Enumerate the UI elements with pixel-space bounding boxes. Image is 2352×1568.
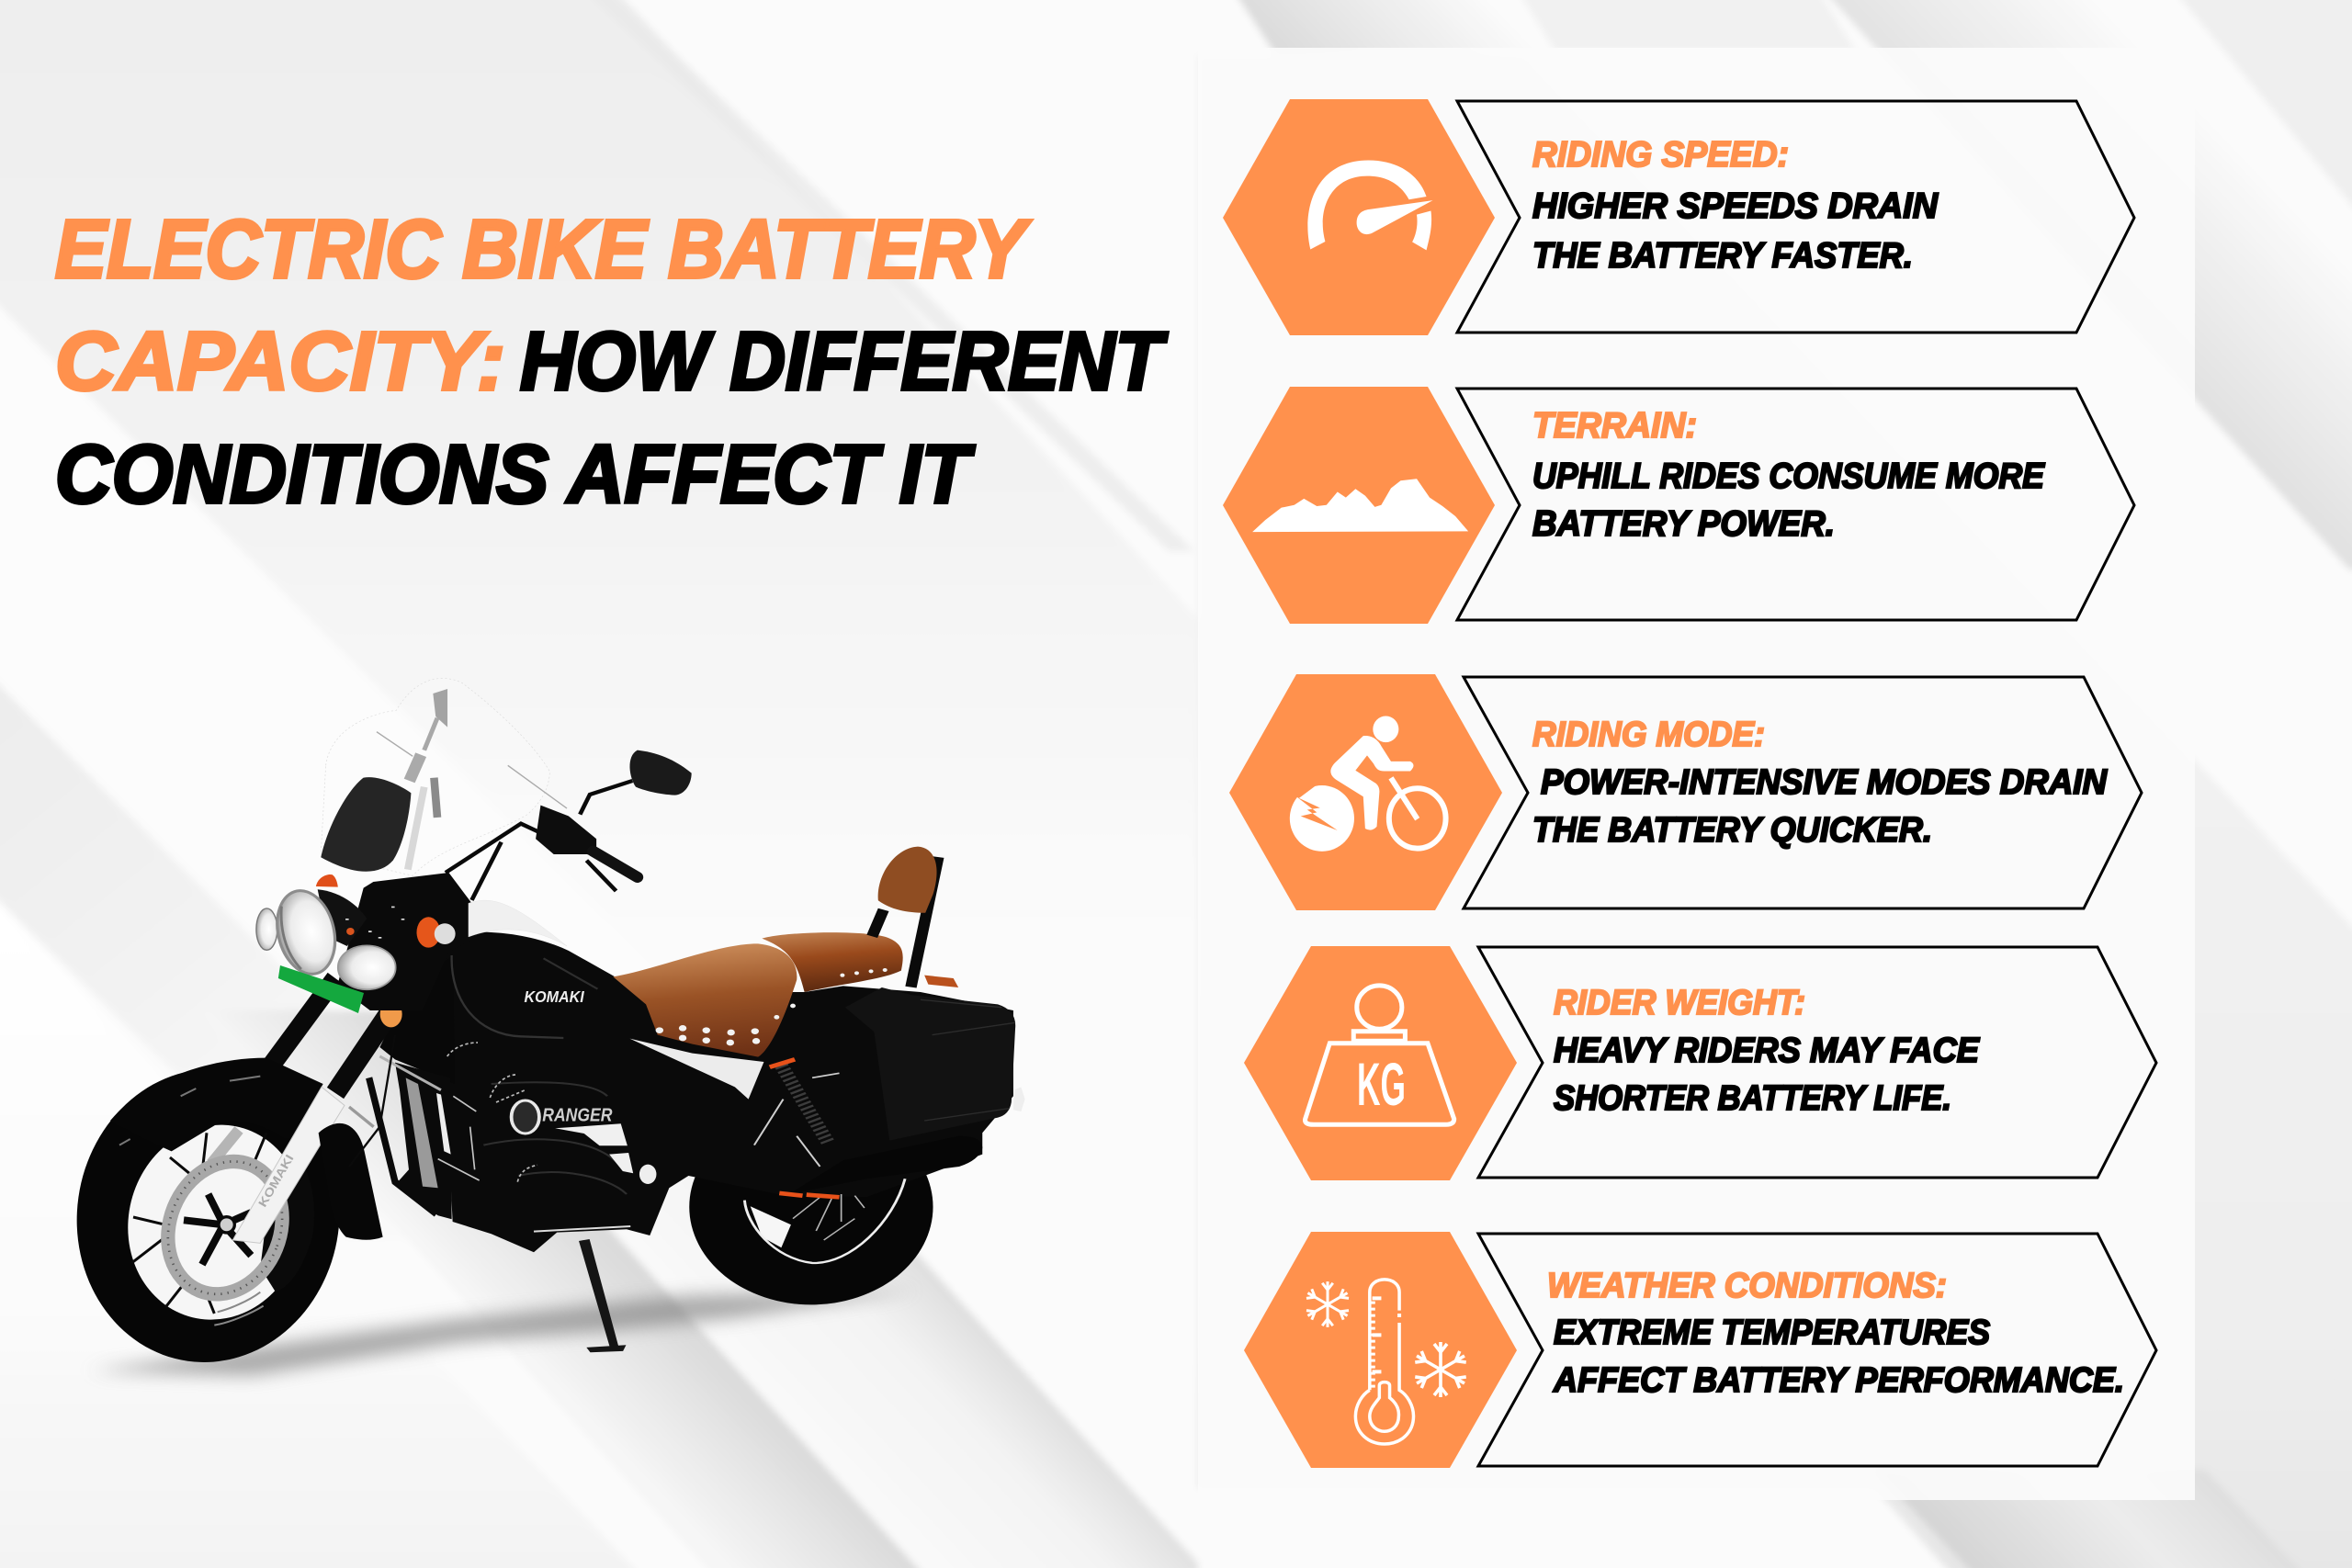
tank logo: KOMAKI	[524, 987, 585, 1006]
swingarm chrome details	[754, 1073, 840, 1167]
fender highlights	[119, 1077, 260, 1145]
icon: electric cyclist	[1290, 716, 1446, 852]
windshield stays	[377, 732, 567, 808]
title line 1: ELECTRIC BIKE BATTERY	[55, 204, 1031, 296]
chrome tank cover	[469, 900, 567, 946]
orange trim	[779, 1193, 840, 1197]
text: HEAVY RIDERS MAY FACE	[1554, 1032, 1981, 1070]
model name: RANGER	[542, 1104, 612, 1125]
mirror mount	[410, 755, 421, 781]
chrome fork	[232, 1087, 345, 1243]
white bolt cap	[639, 1165, 656, 1184]
chrome fork tube	[408, 787, 424, 870]
rear shock absorber	[781, 1066, 828, 1142]
text	[1532, 716, 2108, 850]
text: POWER-INTENSIVE MODES DRAIN	[1541, 763, 2108, 802]
fork label: KOMAKI	[256, 1153, 297, 1209]
fender	[110, 1058, 323, 1151]
tyre	[58, 1052, 358, 1380]
cradle base	[395, 1063, 452, 1219]
chrome plate	[406, 1077, 438, 1188]
text: SHORTER BATTERY LIFE.	[1554, 1079, 1951, 1118]
brake disc	[149, 1145, 301, 1312]
fork upper tube	[335, 953, 430, 1093]
headlight rim shading	[281, 907, 301, 969]
lower indicator	[380, 1001, 402, 1027]
windshield	[321, 678, 549, 875]
backrest strut	[872, 857, 938, 987]
text: WEATHER CONDITIONS:	[1547, 1267, 1947, 1305]
factor 2: terrain	[1223, 387, 2134, 624]
side stripes	[555, 1123, 633, 1173]
arrow frame	[1457, 101, 2134, 333]
arrow frame	[1464, 677, 2142, 908]
switch block	[536, 806, 596, 854]
indicator chrome	[435, 923, 456, 944]
arrow frame	[1457, 389, 2134, 620]
text: HIGHER SPEEDS DRAIN	[1532, 186, 1939, 226]
front seat	[613, 943, 797, 1057]
chrome streak under seat	[629, 1039, 763, 1100]
wheel interior	[107, 1106, 324, 1338]
cross bar	[349, 1107, 374, 1127]
icon: thermometer and snowflakes	[1306, 1280, 1467, 1444]
panel: battery factors	[1198, 48, 2195, 1500]
text: THE BATTERY QUICKER.	[1532, 811, 1932, 850]
crash bar	[379, 1056, 441, 1090]
title line 3: CONDITIONS AFFECT IT	[55, 429, 976, 521]
shock mount	[770, 1059, 795, 1067]
front cockpit and lights	[256, 678, 692, 1013]
title line 2 orange: CAPACITY:	[55, 316, 505, 408]
crash bar curve	[441, 1090, 476, 1169]
spokes	[131, 1133, 266, 1314]
text: RIDING SPEED:	[1532, 135, 1789, 175]
backrest	[872, 847, 938, 987]
rear wheel gap	[751, 1206, 791, 1247]
crash bar chrome	[438, 1096, 480, 1180]
top indicator	[316, 874, 338, 887]
exhaust	[789, 1136, 982, 1194]
main body mass	[441, 932, 1013, 1252]
lamp marker	[346, 928, 355, 935]
grip	[594, 852, 638, 877]
text	[1532, 406, 2045, 544]
seat studs	[656, 968, 888, 1045]
icon: kg weight	[1305, 986, 1454, 1124]
icon: speedometer	[1307, 160, 1433, 250]
backrest pad	[878, 847, 937, 913]
hub centre	[219, 1217, 234, 1233]
rear spokes	[793, 1194, 865, 1240]
text: THE BATTERY FASTER.	[1532, 236, 1913, 276]
title line 2 black: HOW DIFFERENT	[520, 316, 1169, 408]
tail light	[1013, 1087, 1025, 1111]
text: UPHILL RIDES CONSUME MORE	[1532, 457, 2045, 496]
arrow frame	[1478, 947, 2156, 1178]
body and rear section	[441, 932, 1025, 1263]
hexagon	[1223, 99, 1495, 335]
cable	[349, 1035, 395, 1167]
battery badge	[512, 1100, 539, 1134]
title	[55, 204, 1169, 521]
cradle tube	[369, 1077, 436, 1214]
right mirror	[629, 750, 692, 795]
side indicator	[416, 917, 440, 948]
tank rim	[452, 955, 563, 1038]
rear rim	[744, 1179, 905, 1263]
text	[1532, 135, 1939, 276]
fender stay	[319, 1123, 383, 1240]
factor 3: riding mode	[1229, 674, 2142, 910]
text	[1547, 1267, 2124, 1400]
rear seat	[762, 932, 903, 992]
ground shadow	[91, 1291, 914, 1376]
lamp housing	[318, 889, 367, 946]
hexagon	[1229, 674, 1502, 910]
neck mass	[337, 873, 481, 1010]
body trim details	[447, 1043, 537, 1182]
text: BATTERY POWER.	[1532, 504, 1835, 544]
main headlight	[269, 886, 343, 979]
factor 1: riding speed	[1223, 99, 2134, 335]
arrow frame	[1478, 1234, 2156, 1466]
tank highlights	[483, 958, 627, 1194]
rear fork leg behind wheel	[211, 1130, 239, 1164]
text: TERRAIN:	[1532, 406, 1697, 446]
text: EXTREME TEMPERATURES	[1554, 1314, 1990, 1352]
saddlebag	[845, 987, 1015, 1141]
text: RIDING MODE:	[1532, 716, 1765, 754]
hexagon	[1244, 946, 1517, 1180]
factor 4: rider weight	[1244, 946, 2156, 1180]
small lamp	[256, 908, 277, 950]
mirror stem	[424, 718, 437, 750]
text: RIDER WEIGHT:	[1554, 984, 1805, 1022]
icon: kg weight: KG	[1357, 1050, 1406, 1118]
neck bolts	[347, 907, 402, 939]
factor 5: weather conditions	[1244, 1232, 2156, 1468]
mirror arm	[580, 781, 632, 815]
rear indicator	[924, 976, 958, 987]
text: AFFECT BATTERY PERFORMANCE.	[1553, 1361, 2124, 1400]
neck mass	[379, 955, 455, 1084]
handlebar	[446, 824, 616, 900]
brake lever reservoir	[434, 778, 437, 818]
hexagon	[1244, 1232, 1517, 1468]
front visor	[321, 777, 411, 872]
green plate	[278, 965, 364, 1013]
icon: mountains	[1252, 479, 1468, 532]
hexagon	[1223, 387, 1495, 624]
front wheel and fork	[58, 978, 383, 1380]
text	[1554, 984, 1981, 1118]
rim highlights	[214, 1292, 264, 1325]
lower trim	[534, 1226, 630, 1232]
engine cradle and frame	[335, 953, 563, 1219]
lower lamp	[338, 945, 396, 989]
motorcycle illustration	[58, 678, 1025, 1380]
rear wheel and kickstand	[579, 1109, 933, 1352]
caliper side	[260, 1151, 314, 1292]
kickstand	[579, 1239, 626, 1352]
hub arms	[184, 1194, 251, 1265]
rear tyre	[689, 1109, 933, 1304]
left mirror seen through windshield	[433, 689, 447, 728]
chrome sliver	[436, 1093, 451, 1155]
upper left fork tube	[271, 978, 335, 1066]
